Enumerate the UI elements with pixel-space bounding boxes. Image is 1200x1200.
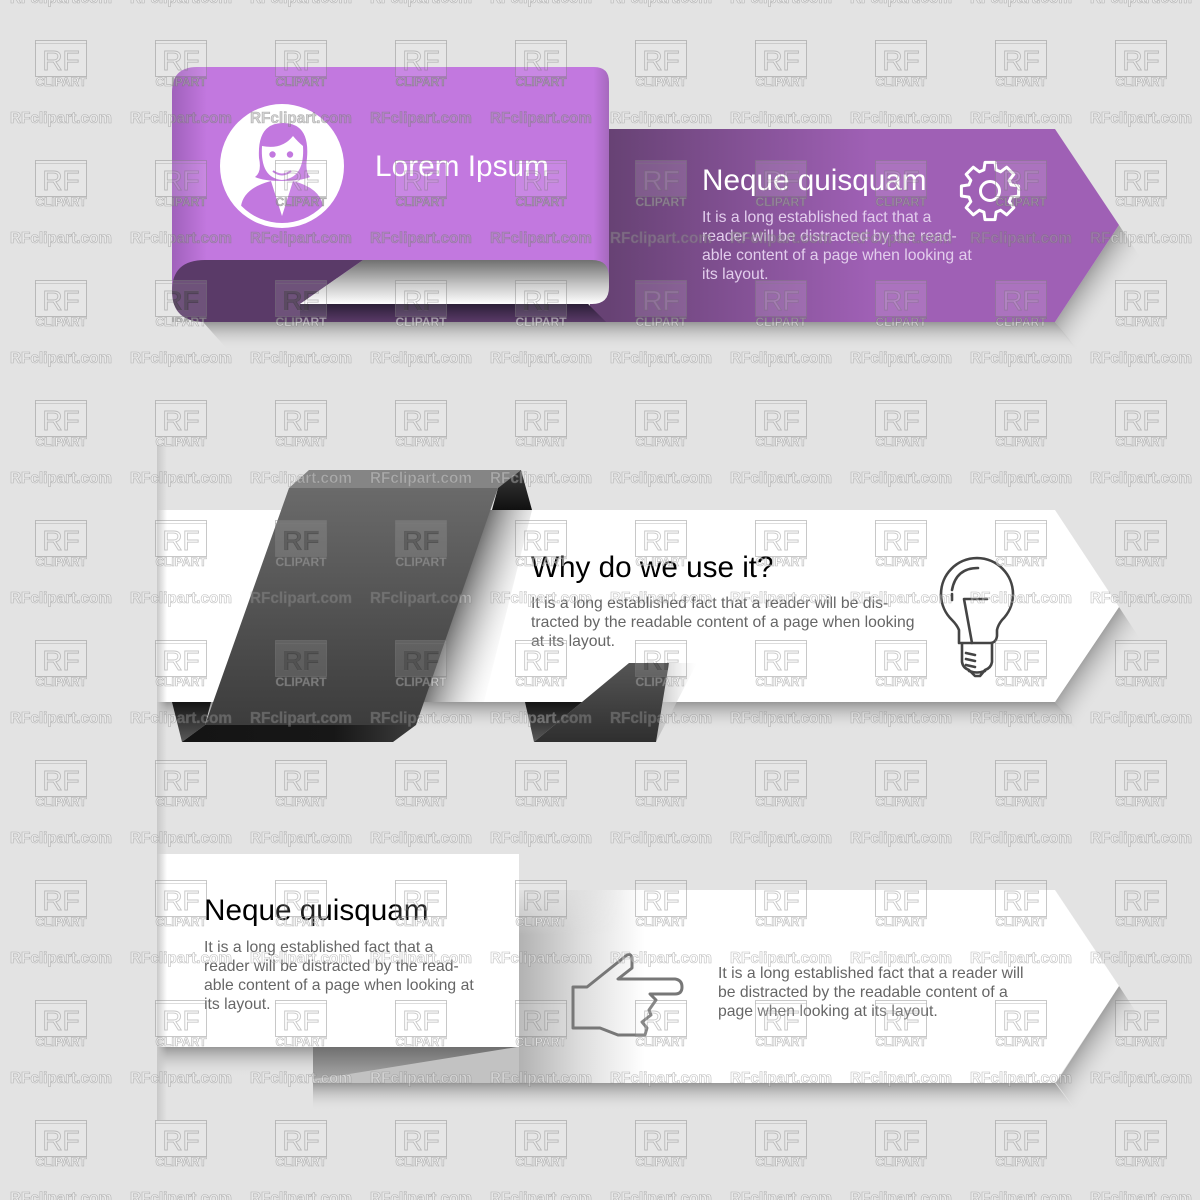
ribbon main panel	[205, 488, 498, 725]
icon: light bulb	[941, 558, 1013, 676]
white banner cast shadow	[157, 607, 1150, 741]
text block: white banner body: tracted by the readable content of a page when looking	[531, 614, 915, 631]
text block: lower banner body: be distracted by the readable content of a	[718, 984, 1008, 1001]
ribbon bottom band	[182, 725, 416, 742]
ribbon cast shadow on banner	[420, 510, 532, 702]
text block: card body: able content of a page when looking at	[204, 977, 474, 994]
shaded strip under the paper fold	[300, 304, 606, 322]
text block: purple banner body: its layout.	[702, 266, 769, 283]
ribbon top back band	[289, 470, 521, 488]
text block: purple banner body	[702, 209, 972, 283]
purple folded flap	[172, 67, 609, 291]
text block: card body: It is a long established fact that a	[204, 939, 434, 956]
ribbon top right fold	[492, 470, 532, 510]
text block: card body: its layout.	[204, 996, 271, 1013]
ribbon lower left fold	[172, 702, 211, 742]
text block: card body: reader will be distracted by the read-	[204, 958, 459, 975]
text block: purple banner body: reader will be distracted by the read-	[702, 228, 957, 245]
white arrow body	[157, 510, 1119, 702]
panel: white banner with dark ribbon	[157, 470, 1150, 742]
heading: Lorem Ipsum: Lorem Ipsum	[375, 150, 549, 183]
purple banner cast shadow	[203, 225, 1150, 361]
dark underside of flap	[172, 260, 606, 322]
heading: Neque quisquam: Neque quisquam	[702, 164, 926, 197]
shaded area beneath card	[313, 1047, 519, 1083]
text block: lower banner body: It is a long established fact that a reader will	[718, 965, 1024, 982]
lower banner cast shadow	[157, 986, 1150, 1122]
shaded fold triangle	[313, 1047, 517, 1079]
soft top fade of arrow shading	[519, 890, 570, 926]
watermark letters on dark areas	[172, 291, 668, 670]
small fold dark corner	[525, 702, 582, 742]
icon: gear	[961, 162, 1019, 220]
text block: white banner body: It is a long established fact that a reader will be dis-	[531, 595, 888, 612]
heading: Why do we use it?: Why do we use it?	[531, 551, 774, 584]
text block: lower banner body: page when looking at its layout.	[718, 1003, 938, 1020]
watermark text dimming on coloured areas	[172, 78, 1110, 726]
purple arrow body	[590, 129, 1119, 322]
heading: Neque quisquam card: Neque quisquam	[204, 894, 428, 927]
grey paper fold	[300, 260, 609, 304]
icon: pointing hand	[573, 955, 682, 1035]
vertical edge shadow	[157, 445, 167, 1120]
small ribbon fold	[534, 663, 669, 742]
white arrow body fading into shade	[519, 890, 1119, 1083]
text block: lower banner body	[718, 965, 1024, 1020]
icon: woman avatar	[220, 104, 344, 228]
front white card	[157, 854, 519, 1047]
text block: card body	[204, 939, 474, 1013]
text block: purple banner body: able content of a page when looking at	[702, 247, 972, 264]
text block: purple banner body: It is a long established fact that a	[702, 209, 932, 226]
text block: white banner body	[531, 595, 915, 650]
small fold soft shadow	[656, 663, 697, 742]
text block: white banner body: at its layout.	[531, 633, 615, 650]
panel: purple banner	[172, 67, 1150, 361]
panel: white banner with front card	[157, 854, 1150, 1122]
